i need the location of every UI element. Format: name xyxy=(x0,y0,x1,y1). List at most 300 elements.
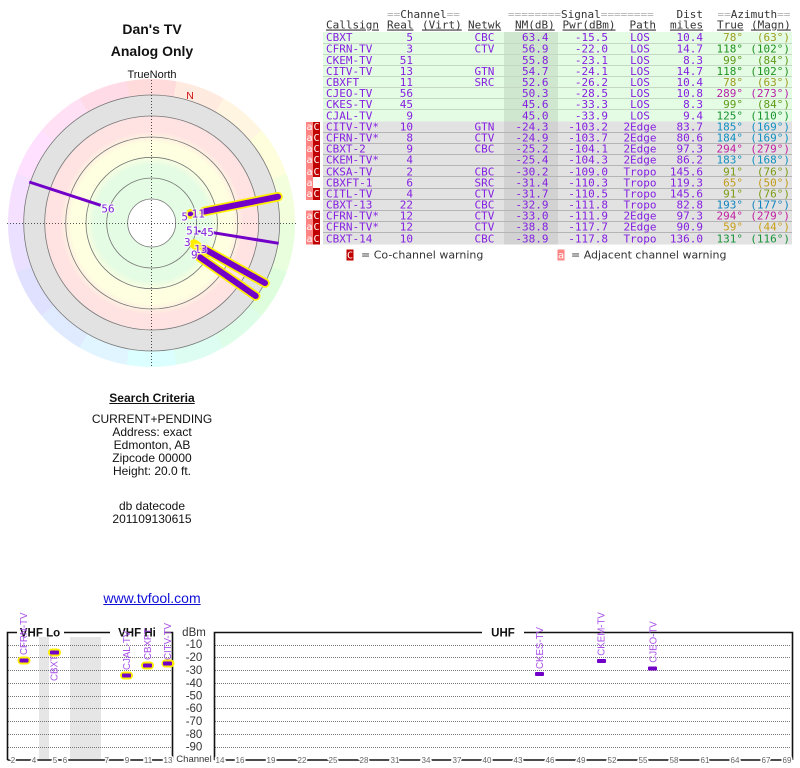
row: CBXT-2: -104.1 xyxy=(568,142,608,156)
vhf channel ticks: 2 xyxy=(11,756,16,765)
row: CBXT-13: CBC xyxy=(474,198,494,212)
db datecode xyxy=(112,499,192,526)
vhf channel ticks: 7 xyxy=(104,756,109,765)
row: CBXT-2: 9 xyxy=(406,142,413,156)
row: CBXT: -15.5 xyxy=(575,31,608,44)
row: CBXT: 78° xyxy=(723,31,743,44)
row: CFRN-TV* 12: CTV xyxy=(474,210,495,222)
uhf channel ticks: 25 xyxy=(329,756,338,765)
table header: Path xyxy=(630,18,656,32)
row: CBXFT: LOS xyxy=(630,76,650,89)
row: CBXT: 5 xyxy=(406,31,413,44)
row: CFRN-TV: 118° xyxy=(716,42,743,56)
row: CITV-TV*: 185° xyxy=(716,120,743,134)
row: CJEO-TV: 289° xyxy=(716,87,743,100)
row: CBXFT-1: CBXFT-1 xyxy=(326,176,372,190)
row: CITV-TV: (102°) xyxy=(750,65,790,78)
row: CJEO-TV: 10.8 xyxy=(676,87,703,100)
channel labels: 11 xyxy=(192,208,205,220)
row: CFRN-TV* 12 second: 90.9 xyxy=(676,220,703,234)
dbm axis labels: -10 xyxy=(186,639,202,651)
north label: N xyxy=(186,90,194,102)
channel labels: 3 xyxy=(184,236,191,249)
row: CFRN-TV: CTV xyxy=(474,42,495,56)
row: CBXT-14: 131° xyxy=(716,232,743,246)
row: CFRN-TV: 3 xyxy=(406,42,413,56)
row: CJAL-TV xyxy=(326,110,790,122)
dbm axis labels: -70 xyxy=(186,716,202,728)
row: CKEM-TV: 51 xyxy=(400,54,413,67)
search parameters xyxy=(92,412,212,478)
row: CBXT-13: Tropo xyxy=(623,198,657,212)
station marker: CJAL-TV xyxy=(120,630,133,680)
row: CKES-TV xyxy=(326,98,790,111)
band titles: VHF Lo xyxy=(20,628,60,640)
row: CBXT-2: 2Edge xyxy=(623,142,657,156)
channel labels: 9 xyxy=(191,248,198,262)
db datecode: db datecode xyxy=(119,499,185,513)
row: CITV-TV*: -103.2 xyxy=(568,120,608,134)
row: CBXFT: 11 xyxy=(400,76,413,89)
row: CJAL-TV: CJAL-TV xyxy=(326,110,373,122)
row: CBXFT: -26.2 xyxy=(575,76,608,89)
table header: Real xyxy=(387,18,414,32)
uhf channel ticks: 49 xyxy=(577,756,586,765)
row: CKEM-TV*: 2Edge xyxy=(623,154,657,166)
uhf channel ticks: 40 xyxy=(483,756,492,765)
row: CFRN-TV* 8: CTV xyxy=(474,132,495,144)
row: CBXFT-1 xyxy=(326,176,790,190)
table header: Callsign xyxy=(326,18,379,32)
row: CFRN-TV* 12 second: CFRN-TV* xyxy=(326,220,379,234)
row: CFRN-TV* 8: -103.7 xyxy=(568,132,608,144)
warning flags: a xyxy=(306,178,313,189)
dbm axis labels xyxy=(176,627,212,765)
station marker: CJAL-TV: CJAL-TV xyxy=(122,630,133,670)
row: CITV-TV: CITV-TV xyxy=(326,65,373,78)
search criteria xyxy=(92,391,212,526)
row: CKSA-TV: (76°) xyxy=(757,166,790,178)
uhf channel ticks: 31 xyxy=(391,756,400,765)
row: CITL-TV: -31.7 xyxy=(515,188,548,200)
warning flags: a xyxy=(306,167,313,178)
row: CBXT: (63°) xyxy=(757,31,790,44)
legend: co-channel warning: = Co-channel warning xyxy=(361,248,483,262)
row: CITV-TV*: (169°) xyxy=(750,120,790,134)
row: CBXT-13: (177°) xyxy=(750,198,790,212)
row: CJEO-TV: CJEO-TV xyxy=(326,87,373,100)
row: CJAL-TV: LOS xyxy=(630,110,650,122)
row: CBXT: 63.4 xyxy=(522,31,549,44)
row: CBXFT-1: SRC xyxy=(474,176,494,190)
station marker: CITV-TV: CITV-TV xyxy=(163,622,174,660)
row: CKEM-TV: 8.3 xyxy=(683,54,703,67)
row: CFRN-TV* 12 second: (44°) xyxy=(757,220,790,234)
row: CITL-TV: Tropo xyxy=(623,188,657,200)
legend: adjacent channel warning: a xyxy=(558,250,564,262)
table header: Netwk xyxy=(468,18,501,32)
row: CBXFT-1: -110.3 xyxy=(568,176,608,190)
row: CBXT-2: CBXT-2 xyxy=(326,142,366,156)
row: CJAL-TV: 9.4 xyxy=(683,110,703,122)
vhf frame xyxy=(8,632,172,760)
warning flags: C xyxy=(313,133,320,144)
ray halos xyxy=(190,197,278,296)
row: CITV-TV: 14.7 xyxy=(676,65,703,78)
legend: co-channel warning: C xyxy=(347,250,353,262)
row: CFRN-TV* 12: 2Edge xyxy=(623,210,657,222)
vhf channel ticks xyxy=(11,756,173,765)
vhf channel ticks: 4 xyxy=(32,756,37,765)
warning flags: a xyxy=(306,122,313,133)
warning flags: a xyxy=(306,144,313,155)
station table xyxy=(306,8,792,262)
row: CBXT-14: -117.8 xyxy=(568,232,608,246)
table header: (Virt) xyxy=(422,18,462,32)
website link: www.tvfool.com xyxy=(103,590,201,606)
uhf channel ticks: 58 xyxy=(670,756,679,765)
row: CKES-TV: 45.6 xyxy=(522,98,548,111)
row: CKEM-TV: (84°) xyxy=(757,54,790,67)
uhf channel ticks: 69 xyxy=(783,756,792,765)
warning flags xyxy=(306,122,320,245)
true north label: TrueNorth xyxy=(127,69,177,81)
uhf channel ticks: 14 xyxy=(216,756,225,765)
row: CFRN-TV* 8: -24.9 xyxy=(515,132,548,144)
row: CBXT-2 xyxy=(326,142,790,156)
dbm axis labels: -60 xyxy=(186,703,202,715)
row: CBXT-14 xyxy=(326,232,790,246)
warning flags: C xyxy=(313,222,320,233)
row: CFRN-TV xyxy=(326,42,790,56)
row: CKEM-TV: LOS xyxy=(630,54,650,67)
row: CJEO-TV: -28.5 xyxy=(575,87,608,100)
row: CKEM-TV*: (168°) xyxy=(750,154,790,166)
row: CBXFT-1: 6 xyxy=(406,176,413,190)
row: CITL-TV: CITL-TV xyxy=(326,188,373,200)
row: CBXFT: 78° xyxy=(723,76,743,89)
dbm axis labels: dBm xyxy=(182,627,206,639)
row: CFRN-TV* 12 second: 2Edge xyxy=(623,220,657,234)
row: CKSA-TV: Tropo xyxy=(623,166,657,178)
db datecode: 201109130615 xyxy=(112,512,192,526)
row: CBXT-2: 294° xyxy=(716,142,743,156)
search parameters: Address: exact xyxy=(112,425,192,439)
row: CITV-TV*: -24.3 xyxy=(515,120,548,134)
row: CITL-TV: -110.5 xyxy=(568,188,608,200)
search parameters: Height: 20.0 ft. xyxy=(113,464,191,478)
warning flags: a xyxy=(306,211,313,222)
row: CFRN-TV: -22.0 xyxy=(575,42,608,56)
row: CKSA-TV: -109.0 xyxy=(568,166,608,178)
row: CFRN-TV* 8: 184° xyxy=(716,132,743,144)
table backgrounds xyxy=(323,32,792,244)
band titles xyxy=(20,628,515,640)
row: CKEM-TV*: 4 xyxy=(406,154,413,166)
disallowed channel bands xyxy=(39,637,101,759)
row: CKEM-TV: -23.1 xyxy=(575,54,608,67)
row: CBXT-14: (116°) xyxy=(750,232,790,246)
row: CKEM-TV*: -25.4 xyxy=(515,154,549,166)
row: CBXT-13: 22 xyxy=(400,198,413,212)
row: CFRN-TV* 12: -111.9 xyxy=(568,210,608,222)
warning flags: a xyxy=(306,189,313,200)
search parameters: Zipcode 00000 xyxy=(112,451,192,465)
dbm axis labels: -80 xyxy=(186,729,202,741)
row: CKSA-TV xyxy=(326,166,790,178)
row: CITV-TV*: 2Edge xyxy=(623,120,657,134)
spectrum chart xyxy=(6,612,794,765)
row: CBXT-14: CBXT-14 xyxy=(326,232,373,246)
table header: ==Azimuth== xyxy=(718,8,791,21)
row: CBXT-14: CBC xyxy=(474,232,494,246)
signal strength bands xyxy=(24,95,280,351)
channel labels: 5 xyxy=(181,210,188,224)
row: CFRN-TV* 12 second: -117.7 xyxy=(568,220,608,234)
row: CFRN-TV* 12 second: CTV xyxy=(474,220,495,234)
row: CJEO-TV: (273°) xyxy=(750,87,790,100)
station marker: CBXT: CBXT xyxy=(50,655,60,681)
row: CBXT: LOS xyxy=(630,31,650,44)
row: CBXT xyxy=(326,31,790,44)
row: CKSA-TV: CBC xyxy=(474,166,494,178)
station marker: CBXT xyxy=(48,648,61,681)
compass hue ring xyxy=(8,79,295,367)
warning flags: a xyxy=(306,155,313,166)
row: CKSA-TV: 91° xyxy=(723,166,743,178)
row: CBXT-2: CBC xyxy=(474,142,494,156)
row: CBXT-2: 97.3 xyxy=(676,142,703,156)
vhf channel ticks: 9 xyxy=(125,756,130,765)
row: CKSA-TV: 145.6 xyxy=(670,166,703,178)
row: CKES-TV: -33.3 xyxy=(575,98,608,111)
row: CITL-TV: (76°) xyxy=(757,188,790,200)
row: CFRN-TV* 8: 80.6 xyxy=(676,132,703,144)
row: CKEM-TV xyxy=(326,54,790,67)
table header: Dist xyxy=(676,8,703,21)
uhf channel ticks: 61 xyxy=(701,756,710,765)
warning flags: C xyxy=(313,144,320,155)
row: CFRN-TV: 14.7 xyxy=(676,42,703,56)
row: CKEM-TV: 55.8 xyxy=(522,54,548,67)
row: CKEM-TV*: CKEM-TV* xyxy=(326,154,379,166)
station marker: CITV-TV xyxy=(162,622,174,668)
search parameters: CURRENT+PENDING xyxy=(92,412,212,426)
warning flags: C xyxy=(313,211,320,222)
dbm axis labels: -30 xyxy=(186,665,202,677)
row: CFRN-TV* 12: 294° xyxy=(716,210,743,222)
legend: adjacent channel warning: = Adjacent channel warning xyxy=(571,248,726,262)
row: CKEM-TV: CKEM-TV xyxy=(326,54,373,67)
range rings xyxy=(24,95,280,351)
row: CBXT: 10.4 xyxy=(676,31,703,44)
row: CFRN-TV: LOS xyxy=(630,42,650,56)
row: CFRN-TV* 8: (169°) xyxy=(750,132,790,144)
row: CFRN-TV* 12: (279°) xyxy=(750,210,790,222)
row: CFRN-TV* 8: 8 xyxy=(406,132,413,144)
dbm axis labels: -90 xyxy=(186,742,202,754)
search criteria heading: Search Criteria xyxy=(109,391,195,405)
row: CJAL-TV: 9 xyxy=(406,110,413,122)
row: CFRN-TV* 12 second: 12 xyxy=(400,220,413,234)
warning flags: a xyxy=(306,234,313,245)
row: CBXFT xyxy=(326,76,790,89)
warning flags: C xyxy=(313,122,320,133)
warning flags: a xyxy=(306,222,313,233)
row: CJEO-TV: 56 xyxy=(400,87,413,100)
row: CITV-TV: LOS xyxy=(630,65,650,78)
row: CKEM-TV*: 86.2 xyxy=(676,154,703,166)
row: CKES-TV: 99° xyxy=(723,98,743,111)
row: CBXFT-1: (50°) xyxy=(757,176,790,190)
vhf channel ticks: 6 xyxy=(63,756,68,765)
row: CBXT-14: -38.9 xyxy=(515,232,548,246)
row: CKEM-TV* xyxy=(326,154,790,166)
row: CBXT-14: 10 xyxy=(400,232,413,246)
station marker: CFRN-TV xyxy=(18,612,30,664)
row: CBXFT-1: Tropo xyxy=(623,176,657,190)
row: CBXFT: 10.4 xyxy=(676,76,703,89)
station marker: CKES-TV: CKES-TV xyxy=(535,626,546,669)
row: CJAL-TV: (110°) xyxy=(750,110,790,122)
row: CJAL-TV: -33.9 xyxy=(575,110,608,122)
row: CBXT-13: CBXT-13 xyxy=(326,198,372,212)
table header: NM(dB) xyxy=(515,18,555,32)
row: CJAL-TV: 125° xyxy=(716,110,743,122)
vhf channel ticks: 5 xyxy=(53,756,58,765)
row: CITV-TV: -24.1 xyxy=(575,65,608,78)
row: CITV-TV: GTN xyxy=(474,65,494,78)
row: CBXT: CBC xyxy=(474,31,494,44)
table header: miles xyxy=(670,18,703,32)
row: CBXFT: (63°) xyxy=(757,76,790,89)
row: CBXT: CBXT xyxy=(326,31,353,44)
row: CFRN-TV* 12: 12 xyxy=(400,210,413,222)
row: CFRN-TV* 12 second: -38.8 xyxy=(515,220,548,234)
station marker: CBXFT xyxy=(141,628,154,670)
row: CJEO-TV: LOS xyxy=(630,87,650,100)
row: CITL-TV: 145.6 xyxy=(670,188,703,200)
row: CKES-TV: LOS xyxy=(630,98,650,111)
dbm axis labels: -20 xyxy=(186,652,202,664)
uhf channel ticks: 16 xyxy=(236,756,245,765)
uhf channel ticks: 55 xyxy=(639,756,648,765)
band titles: UHF xyxy=(491,628,515,640)
title: Dan's TV xyxy=(122,21,182,37)
dbm axis labels: -50 xyxy=(186,690,202,702)
row: CBXFT-1: 119.3 xyxy=(670,176,703,190)
row: CFRN-TV: (102°) xyxy=(750,42,790,56)
station marker: CKEM-TV: CKEM-TV xyxy=(596,612,608,656)
row: CKSA-TV: CKSA-TV xyxy=(326,166,373,178)
station marker: CJEO-TV: CJEO-TV xyxy=(648,621,660,663)
uhf channel ticks xyxy=(216,756,792,765)
search parameters: Edmonton, AB xyxy=(114,438,190,452)
row: CBXT-14: Tropo xyxy=(623,232,657,246)
uhf channel ticks: 43 xyxy=(514,756,523,765)
row: CFRN-TV* 12 second: 59° xyxy=(723,220,743,234)
band titles: VHF Hi xyxy=(118,628,156,640)
row: CFRN-TV* 12: CFRN-TV* xyxy=(326,210,379,222)
grid lines xyxy=(8,646,791,748)
row: CITV-TV xyxy=(326,65,790,78)
channel labels: 45 xyxy=(201,226,214,239)
row: CKES-TV: 8.3 xyxy=(683,98,703,111)
row: CKSA-TV: 2 xyxy=(406,166,413,178)
warning flags: C xyxy=(313,167,320,178)
channel labels: 56 xyxy=(101,202,115,216)
row: CKSA-TV: -30.2 xyxy=(515,166,548,178)
row: CITL-TV xyxy=(326,188,790,200)
row: CITL-TV: CTV xyxy=(474,188,495,200)
uhf channel ticks: 19 xyxy=(267,756,276,765)
row: CBXFT-1: 65° xyxy=(723,176,743,190)
row: CBXT-13: -32.9 xyxy=(515,198,548,212)
row: CBXT-13: 193° xyxy=(716,198,743,212)
row: CJEO-TV xyxy=(326,87,790,100)
row: CBXFT-1: -31.4 xyxy=(515,176,549,190)
station marker: CFRN-TV: CFRN-TV xyxy=(19,612,30,655)
row: CFRN-TV* 8: CFRN-TV* xyxy=(326,132,379,144)
warning flags: a xyxy=(306,133,313,144)
title: Analog Only xyxy=(111,43,193,59)
table header: ==Channel== xyxy=(387,8,460,21)
uhf channel ticks: 34 xyxy=(422,756,431,765)
channel labels: 51 xyxy=(186,224,199,238)
row: CBXT-14: 136.0 xyxy=(670,232,703,246)
center hole xyxy=(128,199,176,247)
row: CFRN-TV* 12: 97.3 xyxy=(676,210,703,222)
table header: (Magn) xyxy=(751,18,791,32)
crosshair xyxy=(7,80,296,367)
uhf channel ticks: 22 xyxy=(298,756,307,765)
channel labels: 13 xyxy=(194,243,207,256)
row: CBXFT: CBXFT xyxy=(326,76,359,89)
row: CBXFT: 52.6 xyxy=(522,76,548,89)
row: CBXT-13: -111.8 xyxy=(568,198,608,212)
polar chart xyxy=(7,69,296,367)
row: CITV-TV: 13 xyxy=(400,65,413,78)
station marker: CBXFT: CBXFT xyxy=(143,628,154,660)
row: CBXT-2: -25.2 xyxy=(515,142,548,156)
row: CITL-TV: 4 xyxy=(406,188,413,200)
row: CFRN-TV* 8 xyxy=(326,132,790,144)
row: CITV-TV*: GTN xyxy=(474,120,494,134)
channel labels xyxy=(101,202,214,262)
row: CKES-TV: CKES-TV xyxy=(326,98,373,111)
row: CITV-TV*: CITV-TV* xyxy=(326,120,379,134)
table header: ========Signal======== xyxy=(508,8,654,21)
row: CFRN-TV* 8: 2Edge xyxy=(623,132,657,144)
row: CFRN-TV* 12 second xyxy=(326,220,790,234)
uhf channel ticks: 52 xyxy=(608,756,617,765)
warning flags: C xyxy=(313,155,320,166)
station rays xyxy=(29,182,279,296)
vhf channel ticks: 11 xyxy=(144,756,153,765)
row: CBXT-13 xyxy=(326,198,790,212)
row: CFRN-TV* 12 xyxy=(326,210,790,222)
table header xyxy=(326,8,791,32)
row: CBXT-2: (279°) xyxy=(750,142,790,156)
row: CFRN-TV: 56.9 xyxy=(522,42,548,56)
row: CITV-TV* xyxy=(326,120,790,134)
row: CJAL-TV: 45.0 xyxy=(522,110,548,122)
vhf channel ticks: 13 xyxy=(164,756,173,765)
uhf channel ticks: 67 xyxy=(762,756,771,765)
dbm axis labels: Channel xyxy=(176,754,212,765)
table header: True xyxy=(717,18,744,32)
row: CITV-TV*: 83.7 xyxy=(676,120,703,134)
